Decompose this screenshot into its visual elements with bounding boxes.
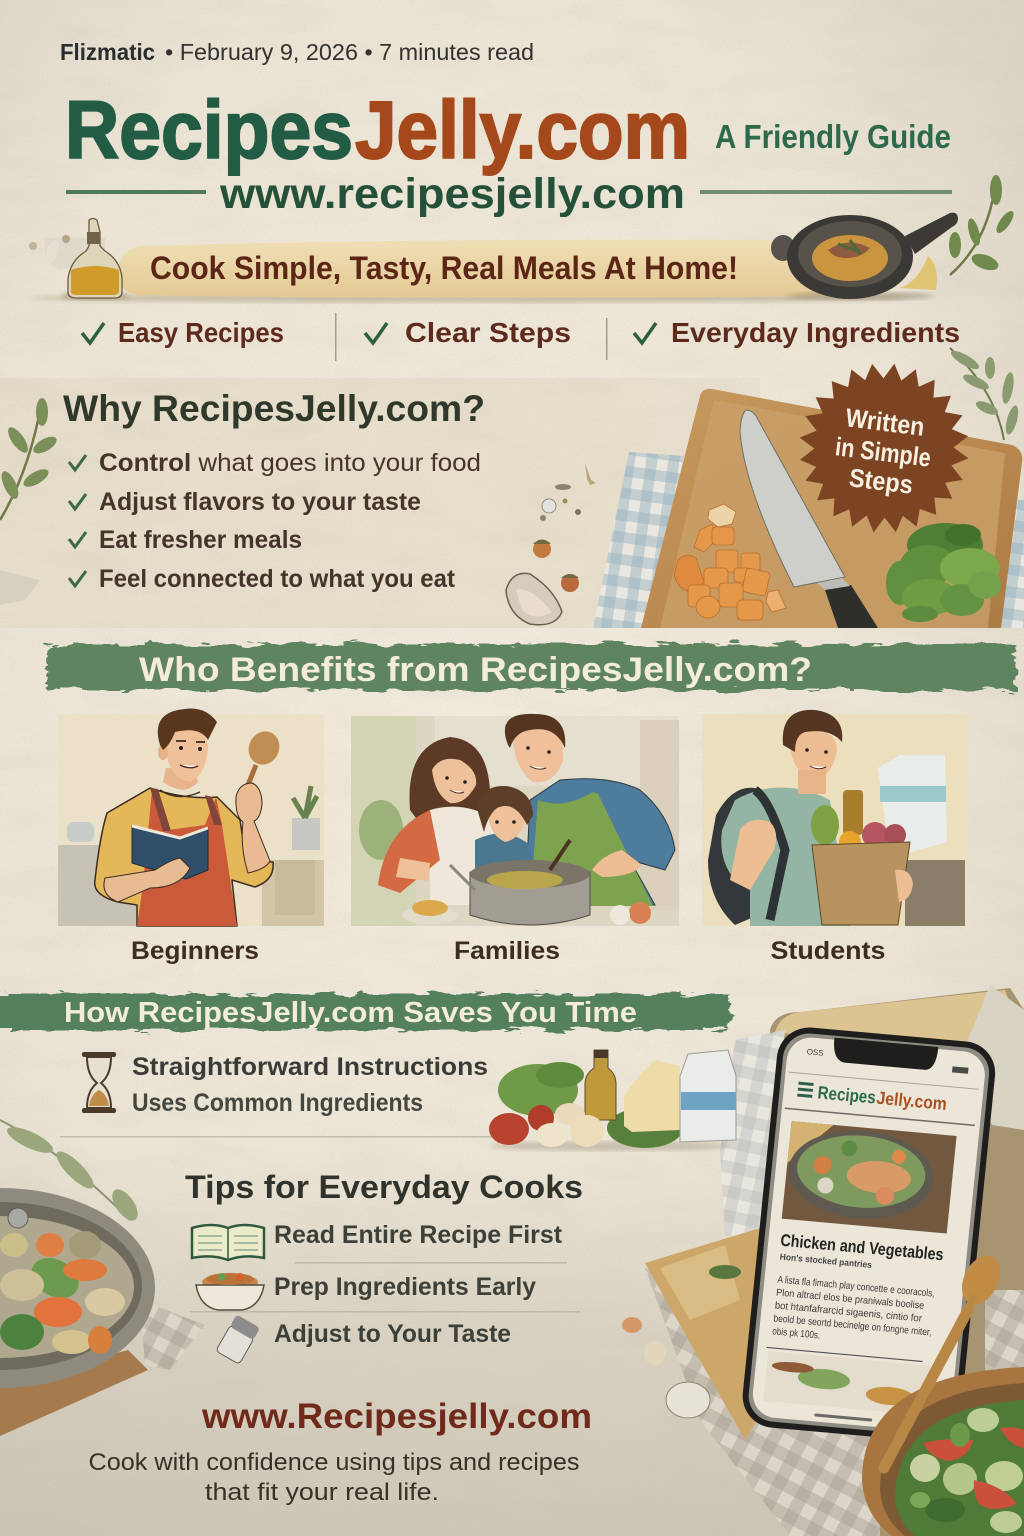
recipe paragraph <box>772 1275 936 1351</box>
tip: read entire recipe first <box>192 1221 563 1260</box>
kitchen background <box>58 714 324 926</box>
lower recipe photo <box>761 1347 931 1415</box>
status bar: OSS <box>806 1047 824 1058</box>
website url with rules <box>66 170 952 218</box>
list: reasons: Eat fresher meals <box>99 526 302 554</box>
illustration: phone with recipe page <box>740 1025 998 1444</box>
badge: written in simple steps: in Simple <box>834 431 933 473</box>
subtitle: A Friendly Guide: A Friendly Guide <box>715 118 951 155</box>
chopped carrots <box>674 504 786 620</box>
panel: students <box>702 710 968 926</box>
icon: hourglass <box>82 1052 116 1113</box>
recipe paragraph: Plon altracl elos be praniwals boolise <box>776 1288 925 1312</box>
label: Families: Families <box>454 937 560 965</box>
icon: skillet with food <box>771 213 958 300</box>
list: reasons <box>69 449 481 593</box>
badge: written in simple steps: Steps <box>848 462 915 500</box>
app header logo: Recipes <box>817 1082 877 1108</box>
app header logo <box>797 1081 948 1114</box>
item: Everyday Ingredients: Everyday Ingredients <box>671 317 960 348</box>
illustration: tablecloth and cutting boards behind phone <box>622 985 1024 1536</box>
tip: adjust to your taste <box>216 1314 511 1364</box>
tip: prep ingredients early: Prep Ingredients Early <box>274 1273 536 1301</box>
heading band: saves time: How RecipesJelly.com Saves You Time <box>64 997 637 1029</box>
closing tagline <box>88 1449 580 1506</box>
time saving points: Uses Common Ingredients <box>132 1089 423 1117</box>
tip: adjust to your taste: Adjust to Your Taste <box>274 1320 511 1348</box>
list: reasons: Feel connected to what you eat <box>99 565 456 593</box>
icon: herb sprig and garlic top right <box>900 175 1017 290</box>
banner: rolling pin slogan <box>30 240 910 303</box>
panel: beginners <box>58 709 324 926</box>
item: Easy Recipes: Easy Recipes <box>118 317 284 348</box>
time saving points: Straightforward Instructions <box>132 1053 488 1081</box>
app header logo: Jelly.com <box>876 1088 948 1114</box>
recipe sub line: Hon's stocked pantries <box>779 1252 872 1270</box>
tip: read entire recipe first: Read Entire Recipe First <box>274 1221 563 1249</box>
recipe paragraph: bot htanfafrarcid sigaenis, cintio for <box>774 1300 923 1325</box>
recipe photo <box>782 1121 957 1234</box>
tip: prep ingredients early <box>196 1273 536 1310</box>
label: Beginners: Beginners <box>131 937 259 965</box>
illustration: cutting board with knife, carrots and greens <box>593 389 1024 628</box>
recipe paragraph: A lista fla fimach play concette e cooracols, <box>777 1275 935 1300</box>
label: Students: Students <box>770 937 886 965</box>
list: reasons: Control what goes into your food <box>99 449 481 477</box>
recipe paragraph: obis pk 100s. <box>772 1326 821 1342</box>
icon: spice scatter <box>29 235 105 270</box>
article meta line: Flizmatic <box>60 39 155 65</box>
slogan text: Cook Simple, Tasty, Real Meals At Home! <box>150 250 738 286</box>
icon: left herb sprig <box>0 398 59 605</box>
gingham cloth <box>593 452 684 628</box>
milk carton <box>878 755 947 858</box>
heading band: who benefits: Who Benefits from RecipesJelly.com? <box>139 651 812 689</box>
icon: olive oil bottle <box>61 218 129 300</box>
icon: top right herb sprig over board <box>949 348 1021 440</box>
illustration: groceries <box>489 1050 736 1151</box>
closing tagline: that fit your real life. <box>205 1479 439 1506</box>
closing website url: www.Recipesjelly.com <box>201 1397 592 1436</box>
grocery bag <box>811 790 910 925</box>
panel: families <box>351 714 679 926</box>
recipe paragraph: beold be seortd becinelge on fongne miter, <box>773 1313 932 1339</box>
badge: written in simple steps: Written <box>844 402 926 442</box>
icon: garlic and crumbs <box>506 463 596 625</box>
title: Jelly.com <box>355 85 690 176</box>
title <box>65 85 690 176</box>
student with backpack and grocery bag <box>708 710 913 926</box>
chopped greens <box>886 523 1001 622</box>
time saving points <box>60 1053 500 1138</box>
list: reasons: Adjust flavors to your taste <box>99 488 421 516</box>
heading band: who benefits <box>46 644 1016 690</box>
illustration: wooden spoon and salad bowl <box>862 1249 1024 1536</box>
knife <box>740 410 878 628</box>
checklist row <box>82 313 960 361</box>
illustration: wok of stew <box>0 1120 205 1436</box>
website url with rules: www.recipesjelly.com <box>219 170 685 218</box>
item: Clear Steps: Clear Steps <box>405 317 571 348</box>
heading: tips for everyday cooks: Tips for Everyday Cooks <box>185 1169 583 1205</box>
wooden board <box>641 389 1022 628</box>
heading: Why RecipesJelly.com: Why RecipesJelly.com? <box>63 388 485 429</box>
family: mother, father, child <box>378 714 675 925</box>
heading band: saves time <box>0 994 730 1030</box>
man with apron, book and spoon <box>95 709 285 926</box>
article meta line: • February 9, 2026 • 7 minutes read <box>165 39 534 65</box>
recipe title: Chicken and Vegetables <box>780 1231 944 1264</box>
tips list <box>190 1221 580 1364</box>
title: Recipes <box>65 85 353 176</box>
badge: written in simple steps <box>789 353 979 543</box>
closing tagline: Cook with confidence using tips and recipes <box>88 1449 580 1476</box>
